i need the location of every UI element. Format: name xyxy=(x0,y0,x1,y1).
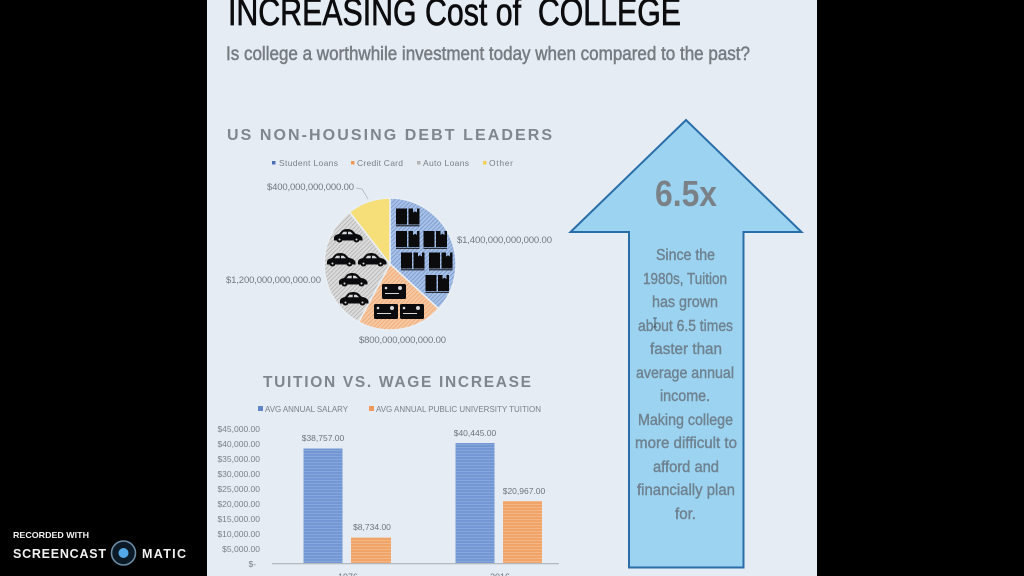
pie legend: Other xyxy=(489,158,513,168)
pie legend xyxy=(272,158,513,168)
arrow shape xyxy=(570,120,802,568)
y axis labels: $- xyxy=(248,559,256,569)
pie legend: Auto Loans xyxy=(423,158,469,168)
arrow body text: faster than xyxy=(650,341,722,358)
arrow body text: about 6.5 times xyxy=(638,318,733,335)
subtitle: Is college a worthwhile investment today when compared to the past? xyxy=(226,44,750,65)
y axis labels: $30,000.00 xyxy=(217,469,260,479)
callout: up arrow xyxy=(570,120,802,568)
y axis labels: $25,000.00 xyxy=(217,484,260,494)
y axis labels: $5,000.00 xyxy=(222,544,260,554)
watermark right word: MATIC xyxy=(142,547,186,561)
arrow body text xyxy=(635,247,737,523)
slide panel background xyxy=(207,0,817,576)
bars xyxy=(304,448,342,564)
bar value labels: $40,445.00 xyxy=(454,428,497,438)
icons: books xyxy=(396,208,452,293)
y axis labels: $40,000.00 xyxy=(217,439,260,449)
pie data labels: $1,400,000,000,000.00 xyxy=(457,235,552,246)
y axis labels: $10,000.00 xyxy=(217,529,260,539)
pie data labels xyxy=(226,182,552,346)
bar legend: AVG ANNUAL PUBLIC UNIVERSITY TUITION xyxy=(376,405,541,414)
arrow body text: income. xyxy=(660,388,710,405)
baseline axis xyxy=(272,563,559,564)
mouse cursor xyxy=(653,318,657,327)
y axis labels: $35,000.00 xyxy=(217,454,260,464)
arrow body text: has grown xyxy=(652,294,718,311)
arrow body text: financially plan xyxy=(637,482,735,499)
arrow body text: Since the xyxy=(656,247,715,264)
watermark caption: RECORDED WITH xyxy=(13,530,89,540)
pie legend: Student Loans xyxy=(279,158,338,168)
bar value labels: $38,757.00 xyxy=(302,433,345,443)
bar value labels: $8,734.00 xyxy=(353,522,391,532)
x axis labels xyxy=(338,572,510,576)
pie data labels: $1,200,000,000,000.00 xyxy=(226,275,321,286)
pie slices xyxy=(324,198,456,330)
watermark logo xyxy=(112,541,136,565)
big number: 6.5x xyxy=(655,173,717,214)
arrow body text: more difficult to xyxy=(635,435,737,452)
y axis labels: $45,000.00 xyxy=(217,424,260,434)
pie legend: Credit Card xyxy=(357,158,403,168)
pie data labels: $800,000,000,000.00 xyxy=(359,335,446,346)
arrow body text: Making college xyxy=(638,412,733,429)
arrow body text: for. xyxy=(675,506,696,523)
bar legend: AVG ANNUAL SALARY xyxy=(265,405,349,414)
bar legend xyxy=(258,405,541,414)
bar value labels: $20,967.00 xyxy=(503,486,546,496)
watermark: screencast-o-matic xyxy=(13,530,186,565)
watermark left word: SCREENCAST xyxy=(13,547,106,561)
arrow body text: afford and xyxy=(653,459,719,476)
arrow body text: average annual xyxy=(636,365,734,382)
heading: debt leaders: US NON-HOUSING DEBT LEADERS xyxy=(227,127,552,144)
pie data labels: $400,000,000,000.00 xyxy=(267,182,354,193)
leader line xyxy=(356,188,368,199)
y axis labels xyxy=(217,424,260,569)
panel: tuition vs wage bar chart xyxy=(217,374,559,576)
bar value labels xyxy=(302,428,546,532)
arrow body text: 1980s, Tuition xyxy=(643,271,727,288)
y axis labels: $20,000.00 xyxy=(217,499,260,509)
heading: tuition vs wage: TUITION VS. WAGE INCREASE xyxy=(263,374,531,391)
panel: debt leaders pie chart xyxy=(226,127,552,346)
icons: credit cards xyxy=(374,284,424,319)
icons: cars xyxy=(327,229,386,306)
y axis labels: $15,000.00 xyxy=(217,514,260,524)
